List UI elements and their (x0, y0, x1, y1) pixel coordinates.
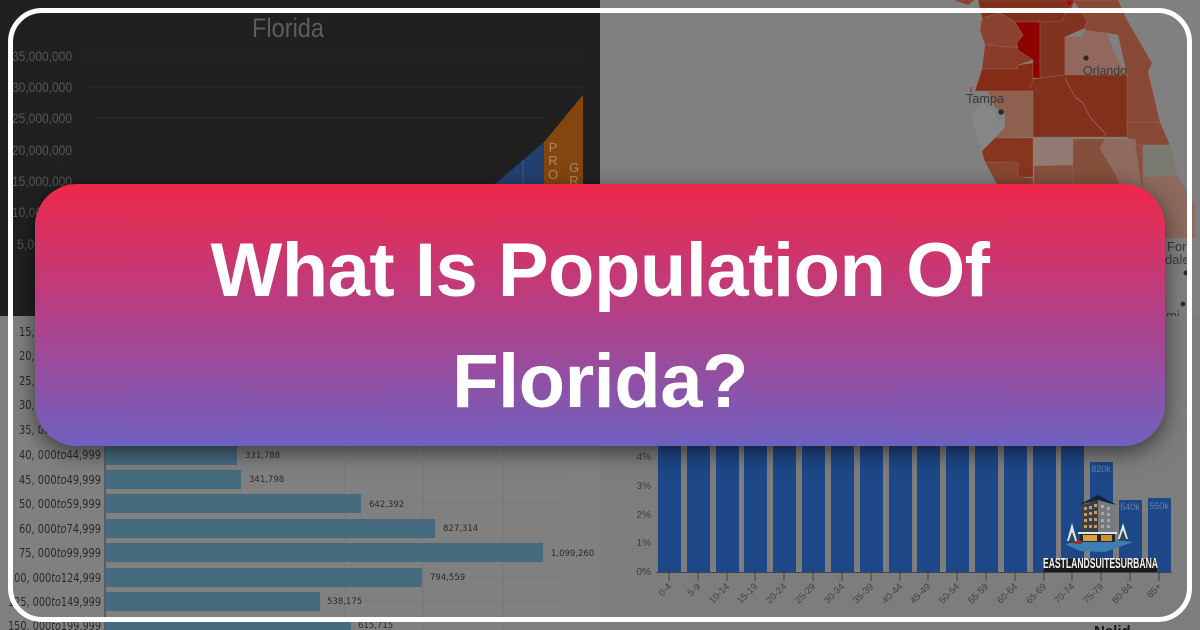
panel: age group column chart: 70-74 (1052, 581, 1077, 606)
panel: age group column chart: 85+ (1145, 581, 1164, 601)
label: Orlando: Orlando (1083, 63, 1127, 78)
title: What Is Population Of (210, 228, 990, 313)
panel: age group column chart: 15-19 (735, 581, 760, 606)
panel: age group column chart: 20-24 (764, 581, 789, 606)
panel: age group column chart: 50-54 (937, 581, 962, 606)
panel: income distribution bar chart: 20, 000to24,999 (19, 349, 101, 363)
panel: income distribution bar chart: 40, 000to44,999 (19, 448, 101, 462)
panel: income distribution bar chart: 45, 000to49,999 (19, 473, 101, 487)
panel: age group column chart: 1% (637, 538, 651, 549)
panel: age group column chart: 5-9 (686, 581, 703, 599)
panel: income distribution bar chart: 125, 000to149,999 (8, 595, 101, 609)
panel: Florida population area chart: R (548, 153, 558, 168)
label: Tampa: Tampa (966, 91, 1005, 106)
panel: age group column chart: 45-49 (908, 581, 933, 606)
panel: Florida county map: mi (1166, 308, 1180, 323)
panel: age group column chart: 65-69 (1024, 581, 1049, 606)
panel: age group column chart: 40-44 (880, 581, 905, 606)
panel: age group column chart: 35-39 (851, 581, 876, 606)
panel: age group column chart: 55-59 (966, 581, 991, 606)
panel: age group column chart: 0% (637, 567, 651, 578)
panel: Florida population area chart: 30,000,000 (12, 79, 72, 95)
panel: Florida population area chart: 5,000,000 (17, 236, 72, 252)
panel: age group column chart: 60-64 (995, 581, 1020, 606)
title banner (35, 184, 1165, 446)
panel: Florida county map: dale (1165, 252, 1190, 267)
panel: age group column chart (600, 316, 1200, 630)
panel: age group column chart: 25-29 (793, 581, 818, 606)
panel: income distribution bar chart: 341,798 (249, 475, 284, 485)
panel: Florida county map (600, 0, 1200, 323)
panel: income distribution bar chart: 50, 000to59,999 (19, 497, 101, 511)
panel: income distribution bar chart: 35, 000to39,999 (19, 423, 101, 437)
panel: Florida population area chart: 15,000,000 (12, 173, 72, 189)
panel: income distribution bar chart: 100, 000to124,999 (8, 571, 101, 585)
panel: Florida population area chart: 10,000,000 (12, 204, 72, 220)
panel: Florida population area chart: 35,000,000 (12, 48, 72, 64)
panel: Florida county map: For (1167, 239, 1187, 254)
panel: age group column chart: 10-14 (707, 581, 732, 606)
panel: age group column chart: 30-34 (822, 581, 847, 606)
panel: Florida population area chart: R (569, 173, 579, 188)
panel: age group column chart: 4% (637, 452, 651, 463)
panel: income distribution bar chart: 75, 000to99,999 (19, 546, 101, 560)
panel: income distribution bar chart: 827,314 (443, 524, 478, 534)
panel: age group column chart: 3% (637, 481, 651, 492)
panel: age group column chart: 80-84 (1110, 581, 1135, 606)
panel: income distribution bar chart: 642,392 (369, 500, 404, 510)
panel: income distribution bar chart: 331,788 (245, 451, 280, 461)
panel: Florida population area chart: G (569, 160, 579, 175)
panel: age group column chart: 540k (1120, 502, 1140, 512)
panel: income distribution bar chart (0, 316, 600, 630)
title (210, 228, 990, 424)
panel: income distribution bar chart: 794,559 (430, 573, 465, 583)
panel: income distribution bar chart: 15, 000to19,999 (19, 325, 101, 339)
panel: Florida population area chart: O (548, 167, 558, 182)
panel: income distribution bar chart: 538,175 (327, 597, 362, 607)
panel: income distribution bar chart: 1,099,260 (551, 549, 594, 559)
panel: income distribution bar chart: 25, 000to29,999 (19, 374, 101, 388)
panel: age group column chart: 2% (637, 510, 651, 521)
panel: income distribution bar chart: 30, 000to34,999 (19, 398, 101, 412)
panel: age group column chart: 75-79 (1081, 581, 1106, 606)
panel: age group column chart: 820k (1091, 464, 1111, 474)
panel: income distribution bar chart: 60, 000to74,999 (19, 522, 101, 536)
panel: Florida population area chart: 20,000,000 (12, 142, 72, 158)
title: Florida? (452, 339, 748, 424)
panel: Florida population area chart: P (549, 140, 557, 155)
panel: age group column chart: 550k (1149, 501, 1169, 511)
panel: Florida population area chart: 25,000,000 (12, 110, 72, 126)
panel: Florida population area chart: Florida (252, 13, 325, 43)
panel: age group column chart: 0-4 (657, 581, 674, 599)
panel: Florida population area chart (0, 0, 600, 316)
